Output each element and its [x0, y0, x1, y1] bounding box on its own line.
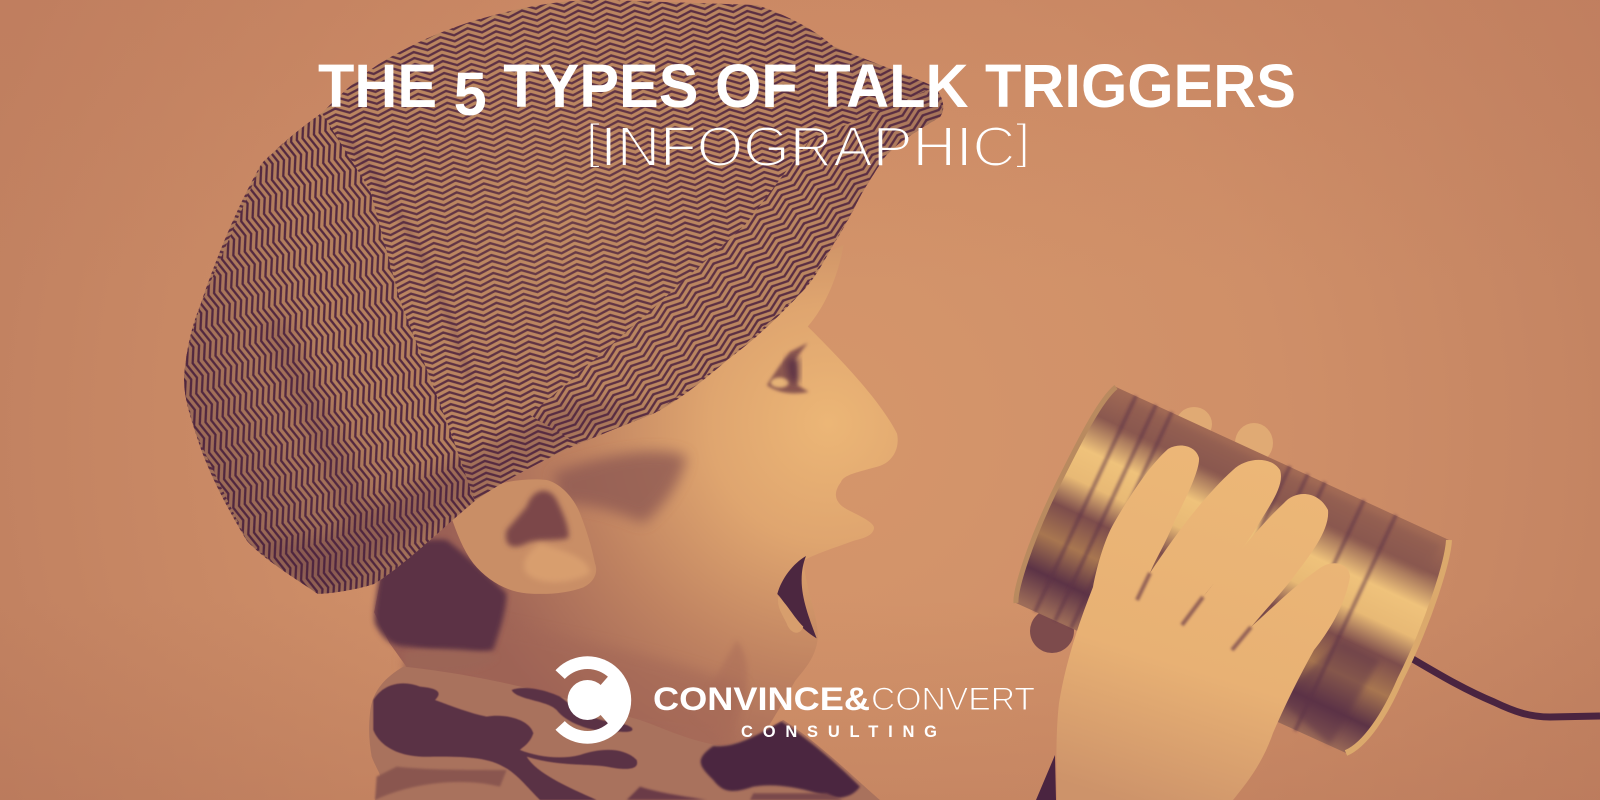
wordmark light: CONVERT	[871, 681, 1035, 717]
neck shading	[403, 600, 743, 747]
heading line 2: [	[586, 115, 601, 169]
ear inner	[506, 491, 569, 547]
finger shadows	[1137, 573, 1251, 650]
photo: child head and scarf	[369, 245, 898, 800]
photo: herringbone cap	[170, 0, 960, 610]
can body	[1016, 387, 1449, 753]
ear	[450, 479, 596, 594]
cap left crown panel	[180, 110, 476, 600]
back fingertips	[1176, 407, 1273, 463]
wordmark: CONVINCE&	[653, 681, 870, 717]
string	[1411, 658, 1600, 717]
hair above ear	[553, 451, 687, 523]
chin shading	[693, 640, 747, 743]
hair at nape	[375, 539, 507, 653]
can top dark streak	[1115, 400, 1440, 575]
scarf blotch near logo	[512, 688, 632, 732]
tongue and teeth	[778, 597, 803, 633]
heading line 2: INFOGRAPHIC	[600, 115, 1016, 179]
scarf	[369, 667, 880, 800]
can ribs	[1035, 396, 1396, 731]
heading line 1: TYPES OF TALK TRIGGERS	[487, 52, 1296, 120]
logo: Convince & Convert Consulting	[556, 656, 1034, 744]
heading line 1: THE	[318, 52, 440, 120]
can right rim	[1346, 540, 1449, 753]
nape fuzz	[403, 650, 497, 673]
icon: C mark	[556, 656, 632, 744]
can shadow	[1030, 609, 1074, 653]
mouth interior	[777, 556, 817, 638]
heading line 2: ]	[1016, 115, 1030, 169]
scarf dark blotch	[373, 683, 637, 800]
can left rim	[1016, 387, 1116, 603]
face	[374, 245, 898, 750]
eye	[767, 343, 809, 393]
sleeve	[1036, 755, 1056, 800]
tagline: CONSULTING	[741, 723, 937, 741]
title	[318, 52, 1296, 179]
cap brim band	[530, 87, 945, 444]
photo: tin can phone with hand	[1016, 387, 1600, 800]
can lower end detail	[1280, 640, 1380, 745]
heading line 1: 5	[454, 60, 487, 128]
neck, hair, ear and mouth	[375, 451, 817, 747]
hand	[1056, 446, 1350, 800]
scarf lower blotch	[375, 767, 507, 800]
shadow under chin	[701, 722, 860, 798]
